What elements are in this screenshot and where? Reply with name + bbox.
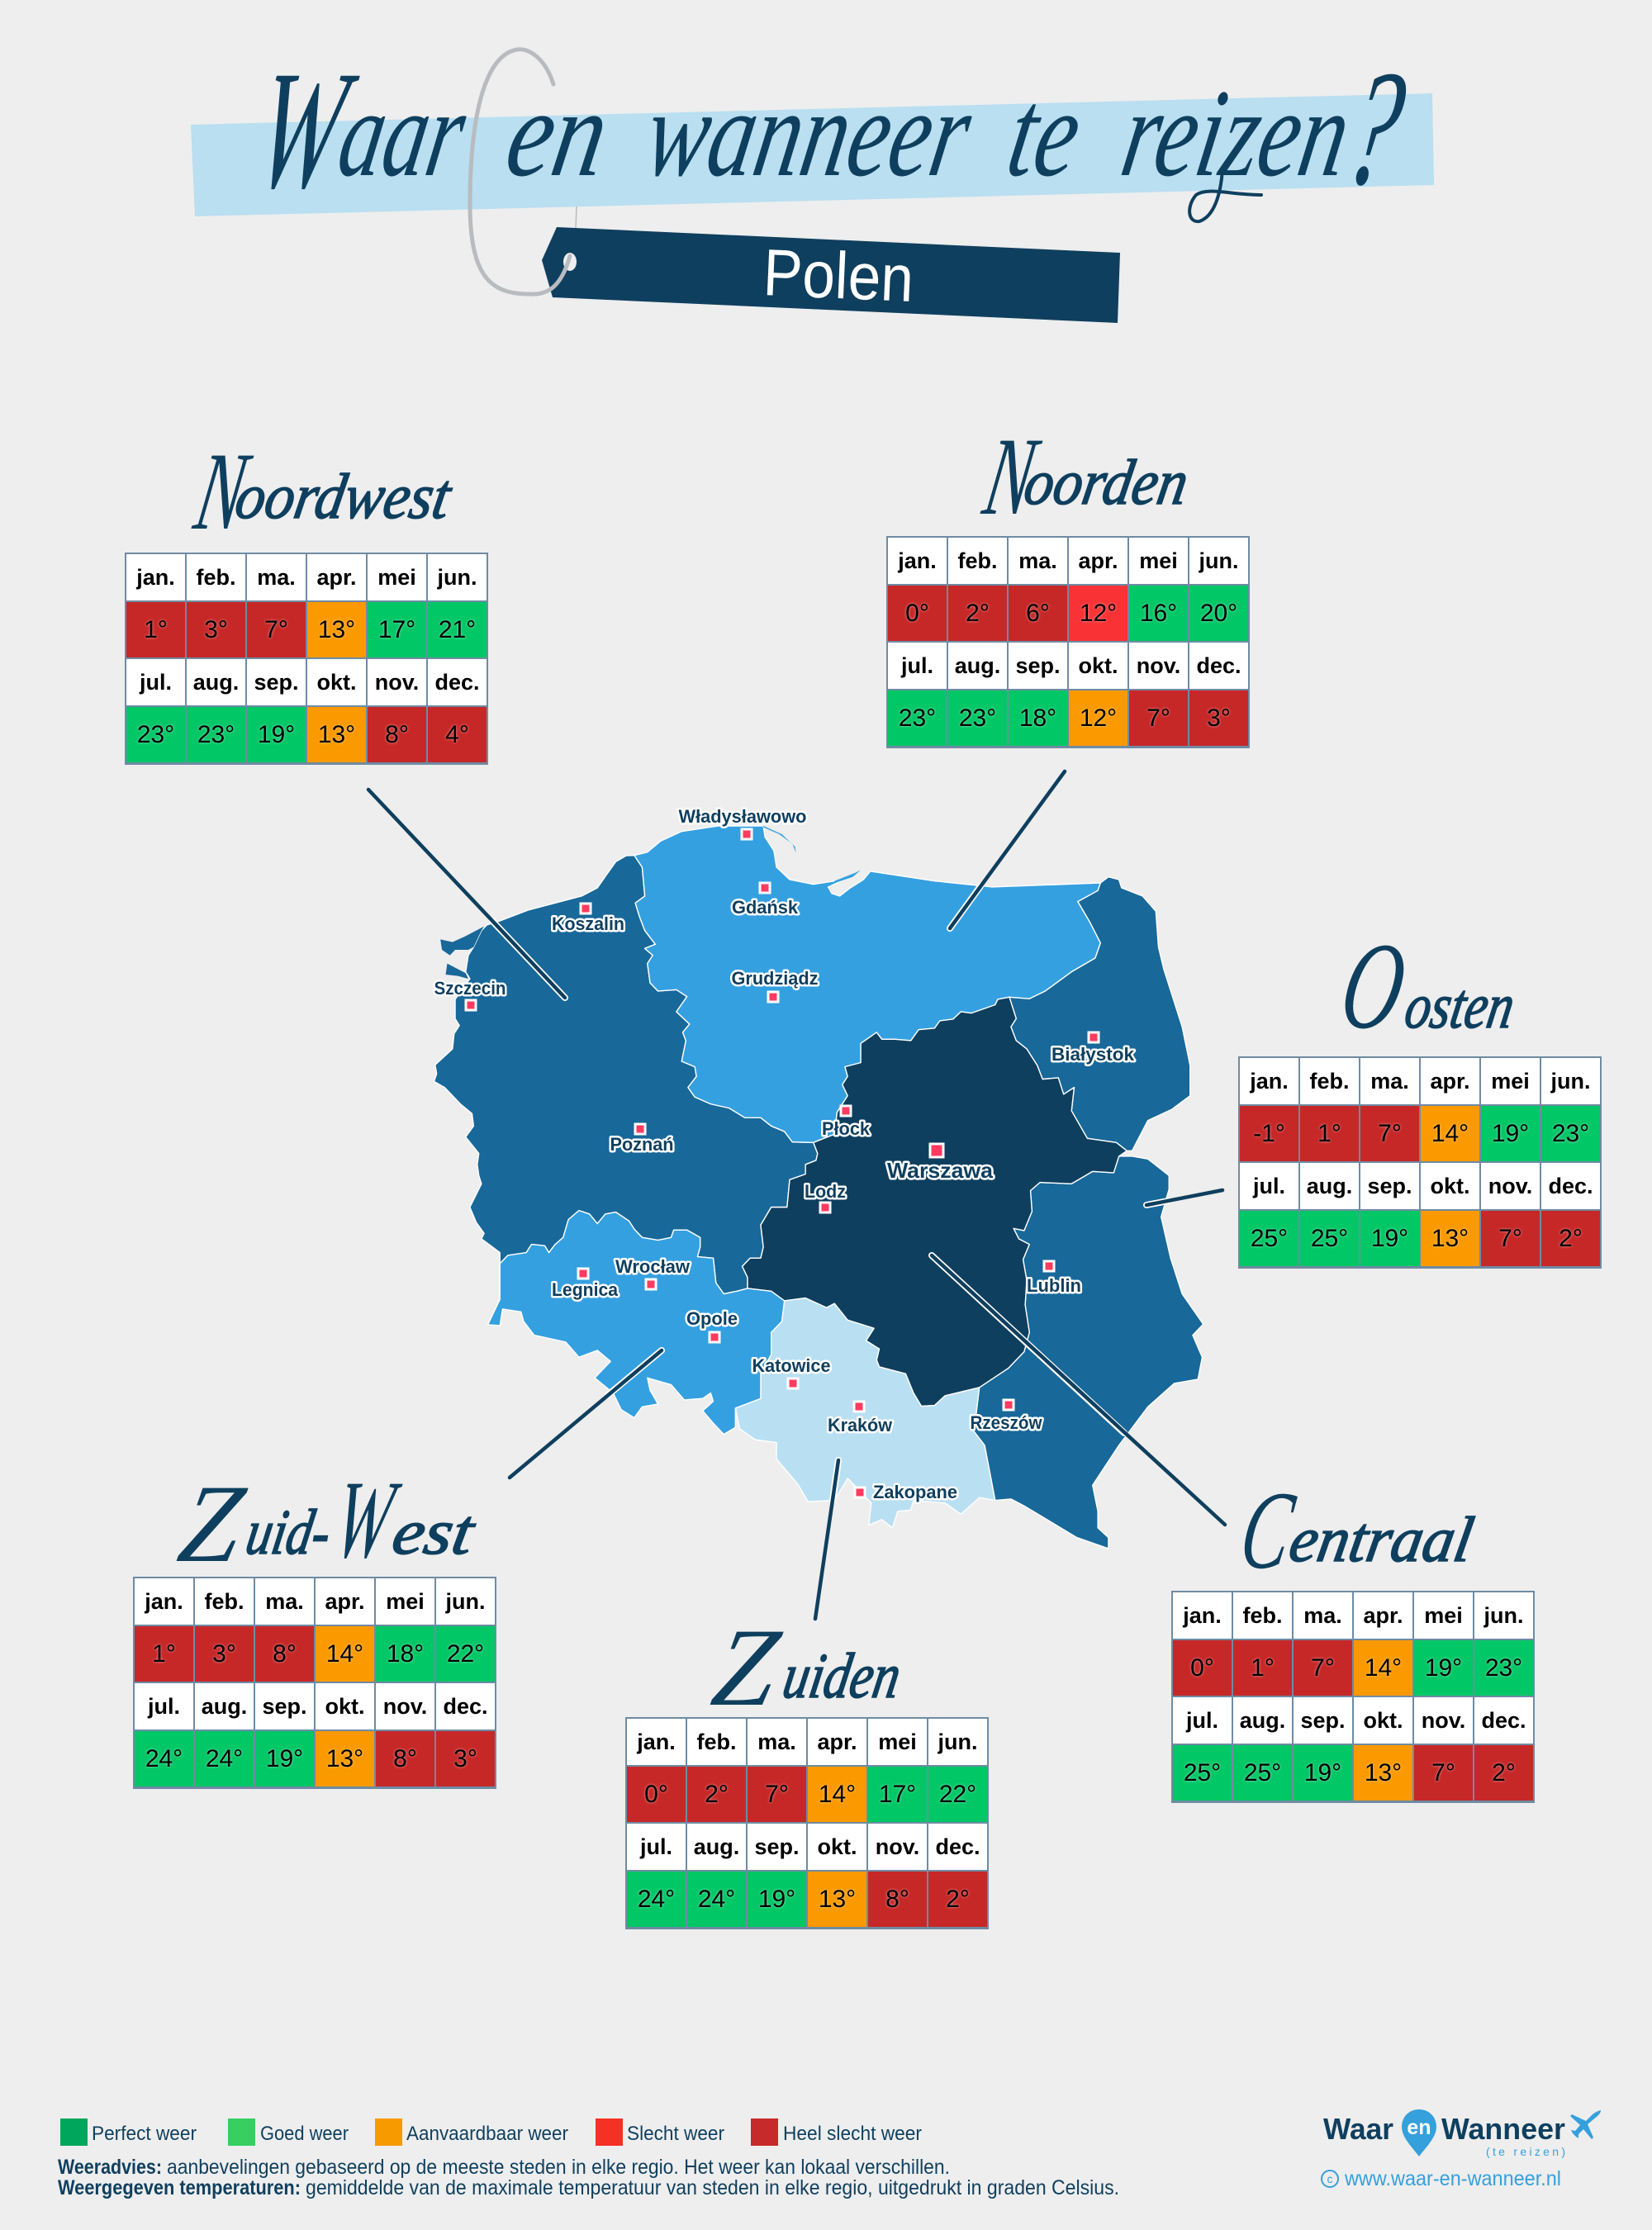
- logo: Wanneer: [1441, 2112, 1565, 2146]
- months jul-dec: nov.: [375, 670, 419, 695]
- temperatures jul-dec: 24°: [638, 1886, 675, 1913]
- temperatures jul-dec: 25°: [1244, 1759, 1281, 1786]
- months jan-jun: jan.: [145, 1589, 183, 1614]
- months jan-jun: jun.: [446, 1589, 486, 1614]
- months jan-jun: ma.: [1370, 1069, 1409, 1094]
- temperatures jan-jun: 6°: [1026, 600, 1050, 627]
- temperatures jan-jun: [135, 1626, 495, 1682]
- legend item: slecht: [596, 2118, 724, 2146]
- title: W: [244, 36, 367, 224]
- months jul-dec: jul.: [148, 1694, 180, 1719]
- months jul-dec: aug.: [202, 1694, 247, 1719]
- months jul-dec: dec.: [1548, 1174, 1593, 1198]
- months jan-jun: feb.: [204, 1589, 244, 1614]
- temperatures jan-jun: 7°: [1378, 1120, 1402, 1147]
- months jan-jun: mei: [386, 1589, 425, 1614]
- months jan-jun: [627, 1719, 987, 1765]
- temperatures jul-dec: [627, 1872, 987, 1927]
- heading: zuid-west: [171, 1459, 481, 1586]
- icon: airplane: [1570, 2110, 1601, 2139]
- months jul-dec: jul.: [1253, 1174, 1285, 1198]
- months jul-dec: aug.: [955, 653, 1000, 678]
- temperatures jul-dec: 3°: [453, 1745, 477, 1772]
- temperatures jul-dec: 25°: [1311, 1225, 1348, 1252]
- city markers and labels: [434, 806, 1135, 1502]
- heading: oosten: O: [1332, 917, 1416, 1055]
- temperatures jul-dec: 7°: [1146, 705, 1170, 732]
- legend item: aanvaardbaar: Aanvaardbaar weer: [406, 2123, 568, 2145]
- temperatures jul-dec: [135, 1731, 495, 1786]
- temperatures jan-jun: 19°: [1425, 1654, 1462, 1682]
- spit: Vistula: [834, 870, 861, 883]
- city markers and labels: Władysławowo: [679, 806, 806, 827]
- temperatures jul-dec: 8°: [385, 721, 409, 748]
- city markers and labels: Legnica: [552, 1279, 619, 1300]
- temperatures jan-jun: [1240, 1106, 1600, 1161]
- icon: map pin: en: [1407, 2116, 1431, 2139]
- temperatures jan-jun: 17°: [378, 616, 415, 643]
- months jul-dec: nov.: [383, 1694, 427, 1719]
- table: zuiden: [626, 1718, 988, 1929]
- temperatures jan-jun: 7°: [765, 1781, 789, 1808]
- months jul-dec: jul.: [901, 653, 933, 678]
- temperatures jul-dec: 13°: [318, 721, 355, 748]
- months jul-dec: dec.: [935, 1834, 980, 1859]
- months jan-jun: jan.: [637, 1729, 676, 1754]
- months jan-jun: jun.: [1483, 1603, 1523, 1628]
- temperatures jul-dec: 24°: [206, 1745, 243, 1772]
- months jul-dec: [888, 643, 1248, 689]
- months jan-jun: jan.: [136, 565, 175, 590]
- months jul-dec: nov.: [1422, 1708, 1465, 1733]
- months jan-jun: feb.: [1242, 1603, 1282, 1628]
- months jul-dec: okt.: [1430, 1174, 1470, 1198]
- city markers and labels: Zakopane: [873, 1482, 957, 1502]
- months jan-jun: feb.: [196, 565, 236, 590]
- months jul-dec: sep.: [1015, 653, 1061, 678]
- website: c: [1327, 2172, 1333, 2185]
- temperatures jan-jun: 2°: [966, 600, 990, 627]
- heading: noordwest: N: [187, 430, 259, 553]
- title: en: [497, 64, 619, 203]
- temperatures jan-jun: 23°: [1552, 1120, 1589, 1147]
- temperatures jul-dec: 19°: [758, 1886, 795, 1913]
- heading: noorden: [976, 415, 1194, 539]
- months jan-jun: ma.: [757, 1729, 796, 1754]
- city markers and labels: Rzeszów: [970, 1412, 1042, 1433]
- region: zuiden: [735, 1298, 995, 1528]
- region: noorden: [634, 826, 1100, 1142]
- temperatures jan-jun: 2°: [705, 1781, 729, 1808]
- months jan-jun: jun.: [1199, 548, 1239, 573]
- title: aar: [330, 64, 477, 203]
- temperatures jan-jun: 14°: [326, 1640, 363, 1668]
- months jan-jun: apr.: [316, 565, 357, 590]
- temperatures jul-dec: 25°: [1184, 1759, 1221, 1786]
- website: www.waar-en-wanneer.nl: [1344, 2167, 1561, 2190]
- temperatures jan-jun: 14°: [819, 1781, 856, 1808]
- temperatures jul-dec: 12°: [1080, 705, 1117, 732]
- temperatures jan-jun: [126, 602, 487, 657]
- months jan-jun: feb.: [957, 548, 998, 573]
- months jan-jun: jan.: [898, 548, 937, 573]
- temperatures jul-dec: 19°: [266, 1745, 303, 1772]
- temperatures jul-dec: 8°: [393, 1745, 417, 1772]
- months jan-jun: jan.: [1250, 1069, 1289, 1094]
- temperatures jul-dec: 24°: [145, 1745, 183, 1772]
- temperatures jan-jun: 13°: [318, 616, 355, 643]
- title: te: [999, 64, 1091, 203]
- peninsula: Hel: [763, 826, 796, 853]
- temperatures jul-dec: 19°: [1371, 1225, 1408, 1252]
- months jul-dec: jul.: [1186, 1708, 1218, 1733]
- region: oosten zuid: [974, 1156, 1203, 1549]
- note: weergegeven temperaturen: Weergegeven temperaturen:: [58, 2176, 301, 2199]
- city markers and labels: Poznań: [610, 1134, 674, 1155]
- temperatures jan-jun: 0°: [905, 600, 929, 627]
- temperatures jul-dec: 4°: [445, 721, 469, 748]
- island: Wolin: [440, 927, 484, 956]
- logo: Waar: [1323, 2112, 1393, 2146]
- months jul-dec: aug.: [1240, 1708, 1285, 1733]
- leader line: centraal: [932, 1255, 1225, 1525]
- city markers and labels: Opole: [686, 1308, 738, 1329]
- months jul-dec: aug.: [694, 1834, 739, 1859]
- heading: centraal: [1232, 1469, 1479, 1592]
- temperatures jan-jun: 1°: [1251, 1654, 1275, 1682]
- heading: centraal: entraal: [1284, 1505, 1479, 1576]
- temperatures jul-dec: 7°: [1431, 1759, 1455, 1786]
- months jan-jun: apr.: [325, 1589, 365, 1614]
- months jan-jun: [1173, 1592, 1533, 1639]
- legend: [60, 2118, 922, 2146]
- months jul-dec: aug.: [193, 670, 239, 695]
- heading: zuiden: uiden: [778, 1641, 906, 1712]
- temperatures jul-dec: 24°: [698, 1886, 735, 1913]
- temperatures jan-jun: 3°: [212, 1640, 236, 1668]
- city markers and labels: Kraków: [828, 1415, 893, 1435]
- heading: centraal: C: [1232, 1469, 1303, 1592]
- temperatures jul-dec: 2°: [1559, 1225, 1583, 1252]
- temperatures jul-dec: 23°: [137, 721, 174, 748]
- leader line: zuiden: [815, 1460, 838, 1619]
- temperatures jan-jun: 22°: [447, 1640, 484, 1668]
- city markers and labels: Warszawa: [887, 1158, 994, 1183]
- temperatures jan-jun: 7°: [264, 616, 288, 643]
- temperatures jan-jun: 22°: [939, 1781, 976, 1808]
- months jan-jun: mei: [878, 1729, 917, 1754]
- temperatures jul-dec: 19°: [258, 721, 295, 748]
- leader line: noordwest: [368, 790, 565, 998]
- temperatures jul-dec: [1240, 1211, 1600, 1266]
- months jul-dec: nov.: [1488, 1174, 1532, 1198]
- city markers and labels: Grudziądz: [732, 968, 818, 989]
- months jul-dec: [135, 1683, 495, 1729]
- temperatures jul-dec: 3°: [1207, 705, 1231, 732]
- temperatures jan-jun: [1173, 1640, 1533, 1696]
- temperatures jul-dec: 23°: [959, 705, 996, 732]
- temperatures jan-jun: 0°: [1190, 1654, 1214, 1682]
- temperatures jul-dec: [888, 690, 1248, 746]
- temperatures jan-jun: 1°: [1317, 1120, 1341, 1147]
- legend item: heel slecht: [751, 2118, 922, 2146]
- city markers and labels: Lodz: [805, 1181, 846, 1202]
- months jan-jun: jan.: [1183, 1603, 1222, 1628]
- months jan-jun: ma.: [1018, 548, 1057, 573]
- temperatures jan-jun: 17°: [879, 1781, 916, 1808]
- table: centraal: [1172, 1592, 1534, 1802]
- temperatures jan-jun: 1°: [152, 1640, 176, 1668]
- months jul-dec: sep.: [262, 1694, 307, 1719]
- months jul-dec: sep.: [754, 1834, 800, 1859]
- months jan-jun: mei: [377, 565, 416, 590]
- temperatures jul-dec: 8°: [885, 1886, 909, 1913]
- heading: zuid-west: Z: [171, 1463, 253, 1586]
- months jan-jun: mei: [1139, 548, 1178, 573]
- temperatures jul-dec: 7°: [1498, 1225, 1522, 1252]
- map of Poland: [434, 826, 1203, 1549]
- months jul-dec: okt.: [817, 1834, 857, 1859]
- heading: zuiden: [705, 1606, 906, 1729]
- legend item: goed: Goed weer: [260, 2123, 349, 2145]
- months jan-jun: [888, 538, 1248, 584]
- temperatures jan-jun: 0°: [644, 1781, 668, 1808]
- title: ?: [1333, 36, 1417, 220]
- temperatures jan-jun: 14°: [1431, 1120, 1469, 1147]
- heading: noorden: oorden: [1019, 448, 1194, 519]
- temperatures jul-dec: 25°: [1251, 1225, 1288, 1252]
- months jul-dec: dec.: [434, 670, 480, 695]
- legend item: perfect: [60, 2118, 197, 2146]
- months jul-dec: nov.: [1137, 653, 1180, 678]
- table: oosten: [1239, 1057, 1601, 1268]
- region: zuid-west: [488, 1211, 785, 1435]
- legend item: slecht: Slecht weer: [627, 2123, 724, 2145]
- legend item: goed: [228, 2118, 349, 2146]
- months jul-dec: [1173, 1697, 1533, 1744]
- temperatures jul-dec: 2°: [1492, 1759, 1516, 1786]
- heading: noordwest: [187, 430, 458, 553]
- note: weergegeven temperaturen: gemiddelde van de maximale temperatuur van steden in elke regio, uitgedrukt in graden Celsius.: [306, 2176, 1119, 2199]
- table: noordwest: [126, 553, 487, 764]
- months jan-jun: jun.: [938, 1729, 978, 1754]
- leader line: zuid-west: [510, 1350, 662, 1478]
- heading: oosten: [1332, 917, 1520, 1055]
- months jul-dec: dec.: [443, 1694, 488, 1719]
- months jul-dec: sep.: [1300, 1708, 1346, 1733]
- heading: zuid-west: est: [387, 1497, 481, 1568]
- heading: zuiden: Z: [705, 1606, 788, 1729]
- temperatures jan-jun: 21°: [439, 616, 476, 643]
- temperatures jan-jun: [627, 1767, 987, 1822]
- temperatures jan-jun: 8°: [273, 1640, 297, 1668]
- months jan-jun: [135, 1578, 495, 1625]
- city markers and labels: Lublin: [1027, 1275, 1081, 1296]
- legend item: heel slecht: Heel slecht weer: [783, 2123, 922, 2145]
- months jul-dec: [627, 1824, 987, 1870]
- months jan-jun: feb.: [696, 1729, 737, 1754]
- months jul-dec: sep.: [1367, 1174, 1412, 1198]
- months jan-jun: ma.: [257, 565, 296, 590]
- months jul-dec: okt.: [316, 670, 357, 695]
- months jul-dec: [1240, 1163, 1600, 1209]
- temperatures jan-jun: 12°: [1080, 600, 1117, 627]
- heading: oosten: osten: [1400, 971, 1520, 1042]
- months jan-jun: mei: [1424, 1603, 1463, 1628]
- title: reizen: [1113, 64, 1360, 203]
- temperatures jul-dec: 2°: [946, 1886, 970, 1913]
- temperatures jul-dec: 18°: [1019, 705, 1056, 732]
- months jul-dec: okt.: [325, 1694, 365, 1719]
- table: zuid-west: [134, 1578, 496, 1788]
- country tag: [542, 206, 1120, 323]
- months jan-jun: feb.: [1309, 1069, 1350, 1094]
- months jul-dec: okt.: [1078, 653, 1118, 678]
- note: weeradvies: aanbevelingen gebaseerd op de meeste steden in elke regio. Het weer kan lokaal verschillen.: [167, 2156, 950, 2179]
- months jul-dec: sep.: [254, 670, 299, 695]
- temperatures jan-jun: 7°: [1311, 1654, 1335, 1682]
- temperatures jan-jun: [888, 586, 1248, 641]
- months jul-dec: dec.: [1481, 1708, 1526, 1733]
- months jan-jun: mei: [1491, 1069, 1530, 1094]
- logo: [1322, 2109, 1601, 2190]
- months jul-dec: jul.: [140, 670, 172, 695]
- temperatures jul-dec: 13°: [1365, 1759, 1402, 1786]
- island: Uznam: [446, 964, 468, 979]
- temperatures jul-dec: 13°: [326, 1745, 363, 1772]
- months jan-jun: ma.: [265, 1589, 304, 1614]
- months jan-jun: apr.: [1078, 548, 1118, 573]
- months jul-dec: okt.: [1363, 1708, 1403, 1733]
- city markers and labels: Koszalin: [552, 913, 624, 934]
- months jul-dec: dec.: [1196, 653, 1241, 678]
- temperatures jan-jun: 18°: [387, 1640, 424, 1668]
- city markers and labels: Wrocław: [615, 1256, 691, 1277]
- city markers and labels: Katowice: [752, 1355, 831, 1376]
- temperatures jan-jun: 3°: [204, 616, 228, 643]
- temperatures jul-dec: 23°: [197, 721, 235, 748]
- temperatures jan-jun: -1°: [1253, 1120, 1285, 1147]
- temperatures jul-dec: [126, 707, 487, 762]
- heading: noorden: N: [976, 415, 1047, 539]
- months jan-jun: [1240, 1058, 1600, 1104]
- region: centraal: [743, 997, 1127, 1407]
- temperatures jul-dec: 13°: [819, 1886, 856, 1913]
- leader line: oosten: [1146, 1190, 1222, 1205]
- title banner: [191, 93, 1434, 216]
- temperatures jan-jun: 14°: [1365, 1654, 1402, 1682]
- months jul-dec: [126, 659, 487, 705]
- months jan-jun: jun.: [1551, 1069, 1591, 1094]
- temperatures jan-jun: 16°: [1140, 600, 1177, 627]
- months jan-jun: apr.: [1363, 1603, 1403, 1628]
- legend item: perfect: Perfect weer: [92, 2123, 197, 2145]
- logo: (te reizen): [1486, 2145, 1565, 2158]
- region: noordwest: [434, 856, 818, 1294]
- heading: noordwest: oordwest: [230, 462, 458, 533]
- note: weeradvies: Weeradvies:: [58, 2156, 162, 2179]
- icon: map pin: [1402, 2109, 1436, 2156]
- tag ring: [470, 50, 570, 294]
- months jan-jun: [126, 554, 487, 600]
- city markers and labels: Gdańsk: [732, 897, 799, 918]
- country tag: Polen: [762, 235, 915, 316]
- temperatures jul-dec: 19°: [1304, 1759, 1341, 1786]
- months jan-jun: jun.: [438, 565, 477, 590]
- temperatures jul-dec: 13°: [1431, 1225, 1469, 1252]
- temperatures jan-jun: 20°: [1200, 600, 1237, 627]
- table: noorden: [887, 537, 1249, 747]
- temperatures jan-jun: 23°: [1485, 1654, 1522, 1682]
- heading: zuid-west: uid-: [241, 1497, 336, 1568]
- months jul-dec: nov.: [876, 1834, 919, 1859]
- months jan-jun: ma.: [1303, 1603, 1342, 1628]
- temperatures jan-jun: 1°: [144, 616, 168, 643]
- title: wanneer: [636, 64, 982, 203]
- city markers and labels: Białystok: [1051, 1044, 1135, 1065]
- city markers and labels: Płock: [822, 1118, 871, 1139]
- legend item: aanvaardbaar: [375, 2118, 568, 2146]
- region: oosten noord: [1009, 877, 1190, 1151]
- months jul-dec: aug.: [1307, 1174, 1352, 1198]
- temperatures jan-jun: 19°: [1492, 1120, 1529, 1147]
- months jan-jun: apr.: [1430, 1069, 1470, 1094]
- months jan-jun: apr.: [817, 1729, 857, 1754]
- leader line: noorden: [950, 771, 1065, 928]
- city markers and labels: Szczecin: [434, 978, 506, 999]
- title: [244, 36, 1417, 224]
- temperatures jul-dec: [1173, 1745, 1533, 1801]
- heading: zuid-west: W: [326, 1459, 407, 1582]
- months jul-dec: jul.: [640, 1834, 672, 1859]
- temperatures jul-dec: 23°: [899, 705, 936, 732]
